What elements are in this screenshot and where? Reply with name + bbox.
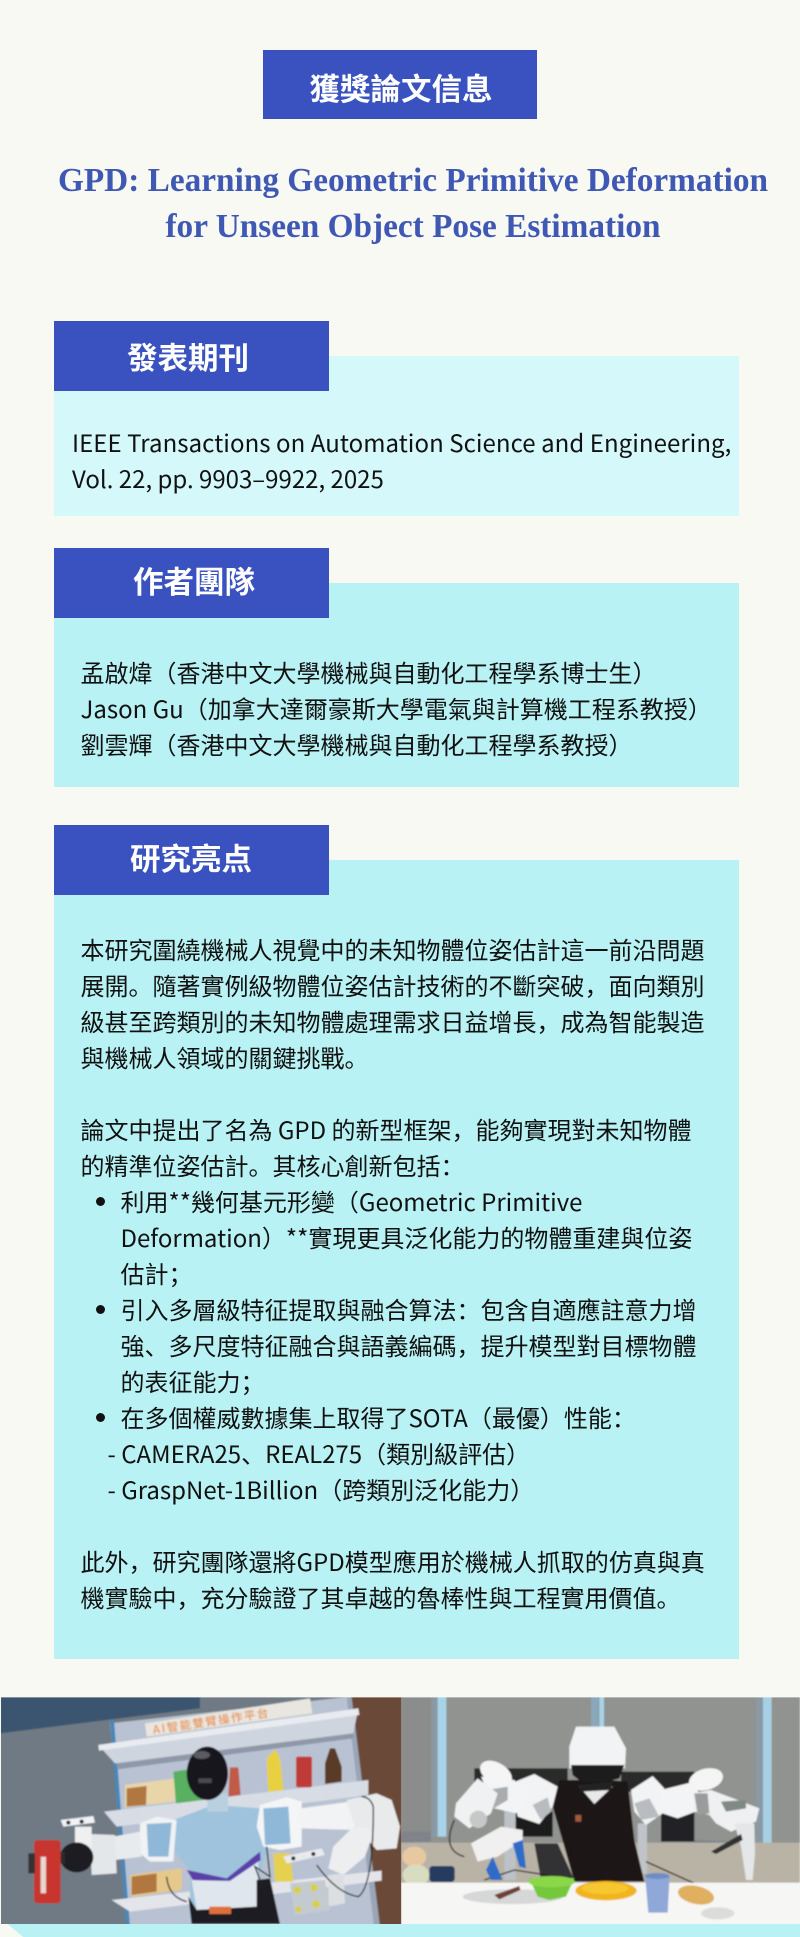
highlights intro paragraph: 本研究圍繞機械人視覺中的未知物體位姿估計這一前沿問題 xyxy=(80,930,704,966)
highlights heading text: 研究亮点 xyxy=(130,835,252,879)
bullet 3: 在多個權威數據集上取得了SOTA（最優）性能： xyxy=(120,1399,636,1434)
bullet 1: 估計； xyxy=(120,1255,192,1290)
panel: highlights body xyxy=(54,860,739,1659)
highlights intro paragraph: 展開。隨著實例級物體位姿估計技術的不斷突破，面向類別 xyxy=(80,966,704,1002)
bullet 2: 的表征能力； xyxy=(120,1363,264,1398)
closing paragraph xyxy=(80,1543,705,1614)
bullet 3: - CAMERA25、REAL275（類別級評估） xyxy=(108,1435,530,1470)
paper title line 1: GPD: Learning Geometric Primitive Deformation xyxy=(58,162,768,199)
panel: journal body xyxy=(54,356,739,516)
panel: authors heading xyxy=(54,548,329,618)
bullet 2: 引入多層級特征提取與融合算法：包含自適應註意力增 xyxy=(120,1291,696,1326)
journal line 2: Vol. 22, pp. 9903–9922, 2025 xyxy=(72,460,384,495)
bullet 3: - GraspNet-1Billion（跨類別泛化能力） xyxy=(108,1471,534,1506)
framework paragraph xyxy=(80,1111,692,1182)
bullet 1: Deformation）**實現更具泛化能力的物體重建與位姿 xyxy=(120,1219,692,1254)
title badge xyxy=(263,50,537,119)
bullet list xyxy=(96,1183,696,1506)
photo: dual-arm robot at shelf xyxy=(0,1697,402,1937)
journal heading text: 發表期刊 xyxy=(127,334,249,378)
panel: journal heading xyxy=(54,321,329,391)
bottom band xyxy=(0,1924,800,1937)
journal line 1: IEEE Transactions on Automation Science and Engineering, xyxy=(72,424,731,459)
author 1: 孟啟煒（香港中文大學機械與自動化工程學系博士生） xyxy=(80,654,656,689)
author 2: Jason Gu（加拿大達爾豪斯大學電氣與計算機工程系教授） xyxy=(80,690,712,725)
photo: dual-arm robot at shelf: AI智能雙臂操作平台 xyxy=(151,1705,271,1738)
authors heading text: 作者團隊 xyxy=(133,558,255,602)
photo: humanoid robot at table xyxy=(401,1697,800,1924)
bullet 1: 利用**幾何基元形變（Geometric Primitive xyxy=(120,1183,582,1218)
bullet 2 xyxy=(96,1291,696,1398)
bullet 3 xyxy=(96,1399,636,1506)
framework paragraph: 論文中提出了名為 GPD 的新型框架，能夠實現對未知物體 xyxy=(80,1111,692,1146)
highlights intro paragraph: 與機械人領域的關鍵挑戰。 xyxy=(80,1038,368,1074)
title badge text: 獲獎論文信息 xyxy=(310,65,492,109)
paper title xyxy=(58,162,768,245)
journal text xyxy=(72,424,731,495)
author 3: 劉雲輝（香港中文大學機械與自動化工程學系教授） xyxy=(80,726,632,761)
framework paragraph: 的精準位姿估計。其核心創新包括： xyxy=(80,1147,464,1182)
closing paragraph: 機實驗中，充分驗證了其卓越的魯棒性與工程實用價值。 xyxy=(80,1579,680,1614)
closing paragraph: 此外，研究團隊還將GPD模型應用於機械人抓取的仿真與真 xyxy=(80,1543,705,1578)
panel: authors body xyxy=(54,583,739,787)
highlights intro paragraph xyxy=(80,930,704,1074)
bullet 2: 強、多尺度特征融合與語義編碼，提升模型對目標物體 xyxy=(120,1327,696,1362)
panel: highlights heading xyxy=(54,825,329,895)
bullet 1 xyxy=(96,1183,692,1290)
highlights intro paragraph: 級甚至跨類別的未知物體處理需求日益增長，成為智能製造 xyxy=(80,1002,704,1038)
paper title line 2: for Unseen Object Pose Estimation xyxy=(165,208,661,245)
authors list xyxy=(80,654,712,761)
